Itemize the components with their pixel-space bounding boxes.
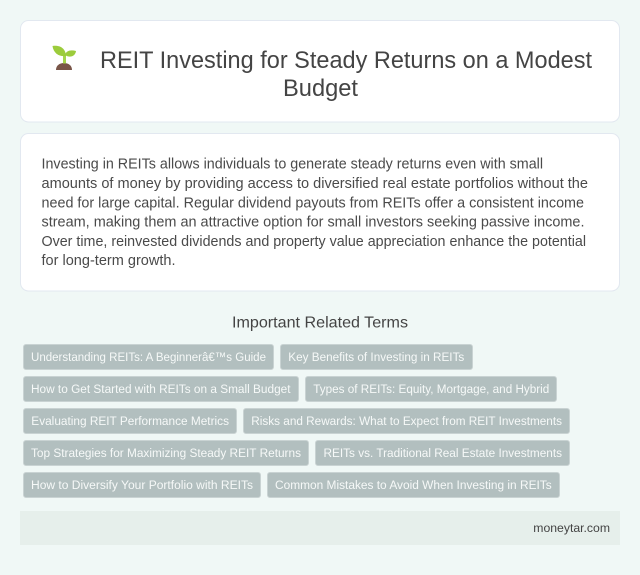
tag: [306, 376, 556, 402]
tag: Risks and Rewards: What to Expect from REIT Investments: [251, 414, 562, 428]
tag: [24, 344, 274, 370]
title: Budget: [283, 75, 358, 102]
tag: Top Strategies for Maximizing Steady REIT Returns: [31, 446, 301, 460]
tag: Understanding REITs: A Beginnerâ€™s Guide: [31, 350, 266, 364]
title: [100, 47, 592, 102]
tag: [268, 472, 560, 498]
tag: [24, 376, 298, 402]
tag: Evaluating REIT Performance Metrics: [31, 414, 229, 428]
tag: [24, 440, 308, 466]
footer text: source: moneytar.com: [533, 521, 610, 535]
tag: How to Diversify Your Portfolio with REITs: [31, 478, 253, 492]
tag: Types of REITs: Equity, Mortgage, and Hybrid: [313, 382, 549, 396]
tag: How to Get Started with REITs on a Small Budget: [31, 382, 291, 396]
tag: [280, 344, 472, 370]
text block: summary paragraph: amounts of money by providing access to diversified real estate portfolios without the: [42, 176, 588, 192]
tag: Common Mistakes to Avoid When Investing in REITs: [275, 478, 552, 492]
tag: Key Benefits of Investing in REITs: [288, 350, 464, 364]
icon: seedling: [52, 46, 76, 70]
tag: [24, 408, 236, 434]
tag: [316, 440, 570, 466]
heading: important related terms: Important Related Terms: [232, 314, 408, 332]
tag: [24, 472, 260, 498]
tag: [244, 408, 570, 434]
text block: summary paragraph: stream, making them an attractive option for small investors seeking passive income.: [42, 214, 584, 230]
text block: summary paragraph: Investing in REITs allows individuals to generate steady returns even with small: [42, 156, 543, 172]
tag: REITs vs. Traditional Real Estate Investments: [324, 446, 562, 460]
text block: summary paragraph: Over time, reinvested dividends and property value appreciation enhance the potential: [42, 234, 586, 250]
text block: summary paragraph: for long-term growth.: [42, 253, 176, 269]
text block: summary paragraph: [42, 156, 588, 269]
tag list: [24, 344, 570, 498]
panel: summary: [20, 134, 620, 291]
title: REIT Investing for Steady Returns on a Modest: [100, 47, 592, 74]
footer: [20, 511, 620, 545]
panel: header: [20, 20, 620, 122]
text block: summary paragraph: need for large capital. Regular dividend payouts from REITs offer a consistent income: [42, 196, 584, 212]
